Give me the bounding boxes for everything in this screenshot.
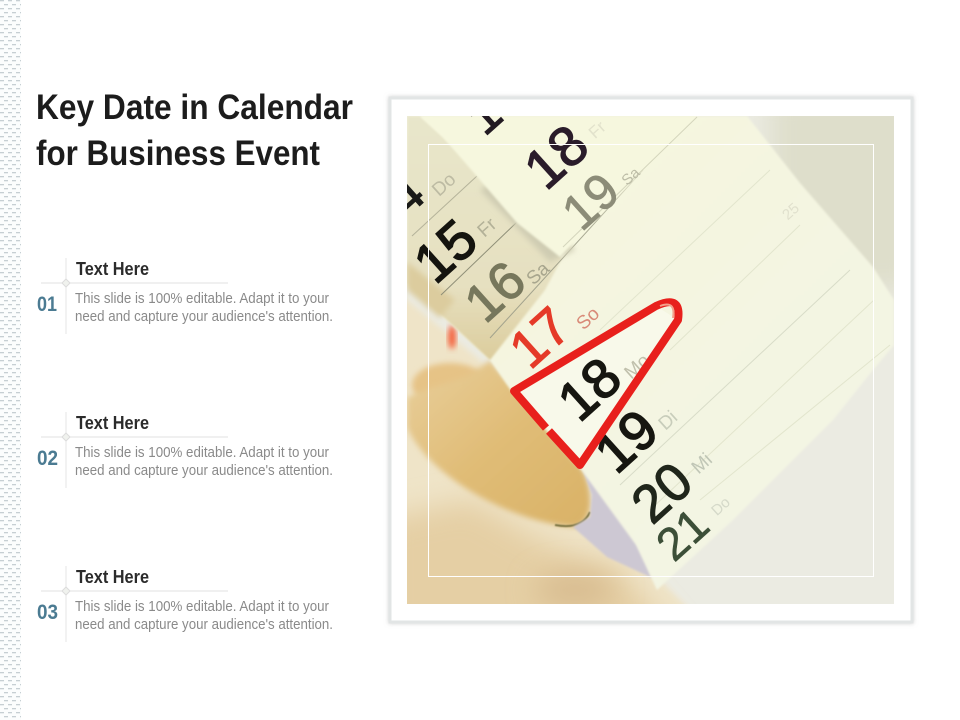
red blur behind page xyxy=(448,325,456,349)
number 18 in marker: 18 xyxy=(546,345,633,432)
item 01 body xyxy=(75,290,333,325)
flap shadow xyxy=(481,186,576,262)
item 01 heading: Text Here xyxy=(76,259,149,279)
label Sa: Sa xyxy=(523,258,554,289)
number 01: 01 xyxy=(37,293,57,316)
number fragment on top page: 1 xyxy=(455,85,513,145)
item 02 body: need and capture your audience's attention. xyxy=(75,462,333,479)
item 03 heading: Text Here xyxy=(76,567,149,587)
shaded left page strip xyxy=(407,116,562,360)
number 20: 20 xyxy=(621,451,704,535)
tan book edge xyxy=(407,360,590,527)
title: Key Date in Calendar xyxy=(36,88,353,127)
label Do lower: Do xyxy=(708,494,734,519)
item 03 body: This slide is 100% editable. Adapt it to your xyxy=(75,598,329,615)
label Fr: Fr xyxy=(474,214,502,242)
label Fr top page: Fr xyxy=(585,117,610,142)
page rule lines xyxy=(412,170,890,510)
main calendar page xyxy=(407,116,894,590)
blurred book upper fade xyxy=(409,360,479,396)
item 01 body: need and capture your audience's attention. xyxy=(75,308,333,325)
calendar photo illustration xyxy=(407,116,894,604)
red triangular date marker xyxy=(514,302,679,465)
number 19: 19 xyxy=(583,397,670,484)
lavender page block xyxy=(573,470,652,578)
label Mi: Mi xyxy=(688,449,717,478)
item 01 body: This slide is 100% editable. Adapt it to your xyxy=(75,290,329,307)
book edge dark tip xyxy=(555,512,590,526)
weekday labels xyxy=(428,117,803,519)
top curled calendar page xyxy=(451,146,644,257)
number 17: 17 xyxy=(499,296,582,380)
label Mo: Mo xyxy=(620,350,654,384)
title: for Business Event xyxy=(36,134,320,173)
list item 02 xyxy=(37,412,333,488)
calendar numbers xyxy=(407,116,798,562)
number 19 on top page: 19 xyxy=(551,162,630,241)
number 02: 02 xyxy=(37,447,58,470)
number 03: 03 xyxy=(37,601,58,624)
number 15: 15 xyxy=(402,207,489,294)
title xyxy=(36,88,353,173)
number 21: 21 xyxy=(646,498,719,571)
item 02 body: This slide is 100% editable. Adapt it to your xyxy=(75,444,329,461)
decorative dashed side strip xyxy=(0,0,21,720)
photo background xyxy=(407,116,894,604)
number 16: 16 xyxy=(454,250,537,334)
item 02 heading: Text Here xyxy=(76,413,149,433)
thin white inner frame xyxy=(428,144,874,576)
item 03 body xyxy=(75,598,333,633)
date marker interior xyxy=(520,309,674,458)
label Di: Di xyxy=(655,407,682,435)
item 03 body: need and capture your audience's attention. xyxy=(75,616,333,633)
label 25: 25 xyxy=(779,200,803,224)
number 18 on top page: 18 xyxy=(512,112,600,201)
photo frame xyxy=(390,98,912,622)
lower left blurred desk xyxy=(407,298,685,604)
label Sa top page: Sa xyxy=(618,164,644,189)
list item 03 xyxy=(37,566,333,642)
number 14 fragment: 4 xyxy=(383,170,434,224)
item 02 body xyxy=(75,444,333,479)
label So: So xyxy=(573,303,604,334)
label Do: Do xyxy=(428,169,460,201)
list item 01 xyxy=(37,258,333,334)
